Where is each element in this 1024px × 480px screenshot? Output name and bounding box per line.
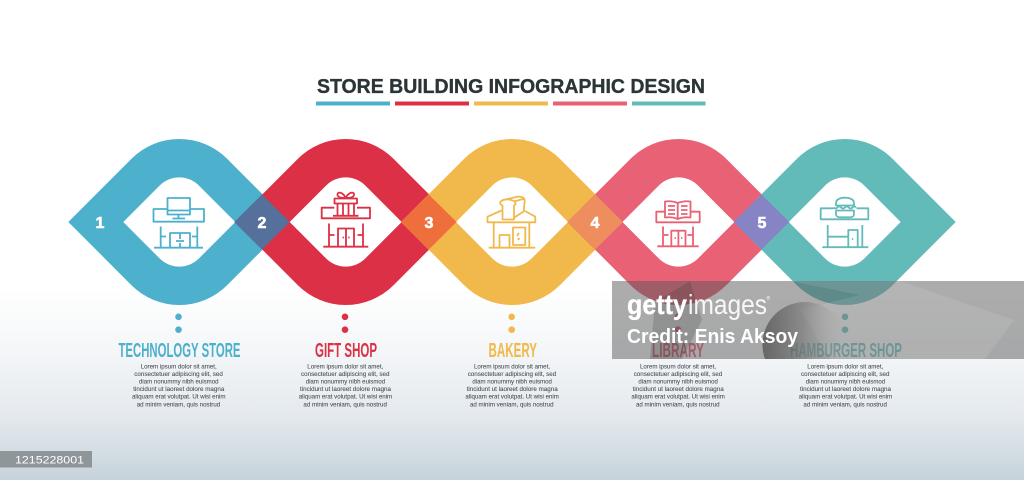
- panel: technology store diamond: [68, 139, 290, 305]
- text block: gift shop: Lorem ipsum dolor sit amet,: [307, 363, 384, 370]
- text block: hamburger shop: ad minim veniam, quis nostrud: [803, 401, 887, 408]
- text block: gift shop: tincidunt ut laoreet dolore magna: [300, 386, 391, 393]
- text block: gift shop: ad minim veniam, quis nostrud: [303, 401, 387, 408]
- panel: hamburger shop diamond: [734, 139, 956, 305]
- text block: hamburger shop: consectetuer adipiscing elit, sed: [801, 371, 890, 378]
- connector dots: [175, 314, 848, 333]
- panel: library diamond: [567, 139, 789, 305]
- text block: bakery: ad minim veniam, quis nostrud: [470, 401, 554, 408]
- text block: technology store: Lorem ipsum dolor sit amet,: [141, 363, 217, 370]
- text block: technology store: consectetuer adipiscing elit, sed: [134, 371, 223, 378]
- watermark logo: images: [688, 289, 767, 320]
- text block: technology store: [132, 363, 226, 408]
- panel: gift shop diamond: [235, 139, 457, 305]
- heading: library: LIBRARY: [652, 339, 704, 362]
- text block: technology store: aliquam erat volutpat. Ut wisi enim: [132, 394, 226, 401]
- icon: technology store: [154, 198, 204, 248]
- watermark banner: [612, 281, 1024, 359]
- text block: technology store: tincidunt ut laoreet dolore magna: [133, 386, 225, 393]
- text block: technology store: ad minim veniam, quis nostrud: [137, 401, 221, 408]
- heading: technology store: TECHNOLOGY STORE: [118, 339, 240, 362]
- heading: bakery: BAKERY: [488, 339, 537, 362]
- step numbers: [96, 215, 767, 232]
- text block: gift shop: aliquam erat volutpat. Ut wisi enim: [299, 394, 392, 401]
- panel: bakery diamond: [401, 139, 623, 305]
- overlap: step 4 diamond: [567, 194, 623, 250]
- overlap: step 3 diamond: [401, 194, 457, 250]
- text block: gift shop: consectetuer adipiscing elit, sed: [301, 371, 390, 378]
- text block: hamburger shop: diam nonummy nibh euismod: [806, 378, 886, 386]
- heading: gift shop: GIFT SHOP: [315, 339, 377, 362]
- text block: gift shop: diam nonummy nibh euismod: [306, 378, 386, 386]
- text block: hamburger shop: Lorem ipsum dolor sit amet,: [807, 363, 884, 370]
- text block: library: Lorem ipsum dolor sit amet,: [640, 363, 716, 370]
- text block: hamburger shop: aliquam erat volutpat. Ut wisi enim: [799, 394, 892, 401]
- icon: bakery: [488, 196, 535, 248]
- image id badge: [0, 451, 92, 468]
- step numbers: 1: [96, 215, 105, 232]
- text block: bakery: [465, 363, 559, 408]
- watermark logo: getty: [627, 289, 687, 320]
- heading: hamburger shop: HAMBURGER SHOP: [790, 339, 902, 362]
- text block: library: aliquam erat volutpat. Ut wisi enim: [631, 394, 725, 401]
- text block: library: [631, 363, 725, 408]
- text block: bakery: consectetuer adipiscing elit, sed: [468, 371, 557, 378]
- icon: library: [656, 201, 700, 246]
- text block: library: tincidunt ut laoreet dolore magna: [633, 386, 724, 393]
- overlap: step 5 diamond: [734, 194, 789, 250]
- text block: bakery: aliquam erat volutpat. Ut wisi enim: [465, 394, 559, 401]
- watermark credit: Credit: Enis Aksoy: [627, 326, 799, 348]
- text block: technology store: diam nonummy nibh euismod: [139, 378, 219, 386]
- title: STORE BUILDING INFOGRAPHIC DESIGN: [317, 76, 705, 98]
- step numbers: 2: [258, 215, 267, 232]
- text block: bakery: diam nonummy nibh euismod: [472, 378, 552, 386]
- text block: bakery: Lorem ipsum dolor sit amet,: [474, 363, 550, 370]
- text block: library: diam nonummy nibh euismod: [638, 378, 718, 386]
- text block: hamburger shop: [799, 363, 892, 408]
- text block: bakery: tincidunt ut laoreet dolore magna: [467, 386, 558, 393]
- step numbers: 3: [425, 215, 434, 232]
- watermark logo: ®: [766, 295, 770, 302]
- step numbers: 4: [591, 215, 600, 232]
- step numbers: 5: [758, 215, 767, 232]
- text block: gift shop: [299, 363, 392, 408]
- title colour bars: [316, 102, 706, 106]
- text block: library: ad minim veniam, quis nostrud: [636, 401, 720, 408]
- text block: library: consectetuer adipiscing elit, sed: [634, 371, 723, 378]
- icon: hamburger shop: [821, 198, 868, 247]
- watermark logo: [627, 289, 770, 320]
- icon: gift shop: [322, 193, 370, 247]
- image id badge: 1215228001: [15, 454, 84, 466]
- text block: hamburger shop: tincidunt ut laoreet dolore magna: [800, 386, 891, 393]
- overlap: step 2 diamond: [234, 194, 290, 250]
